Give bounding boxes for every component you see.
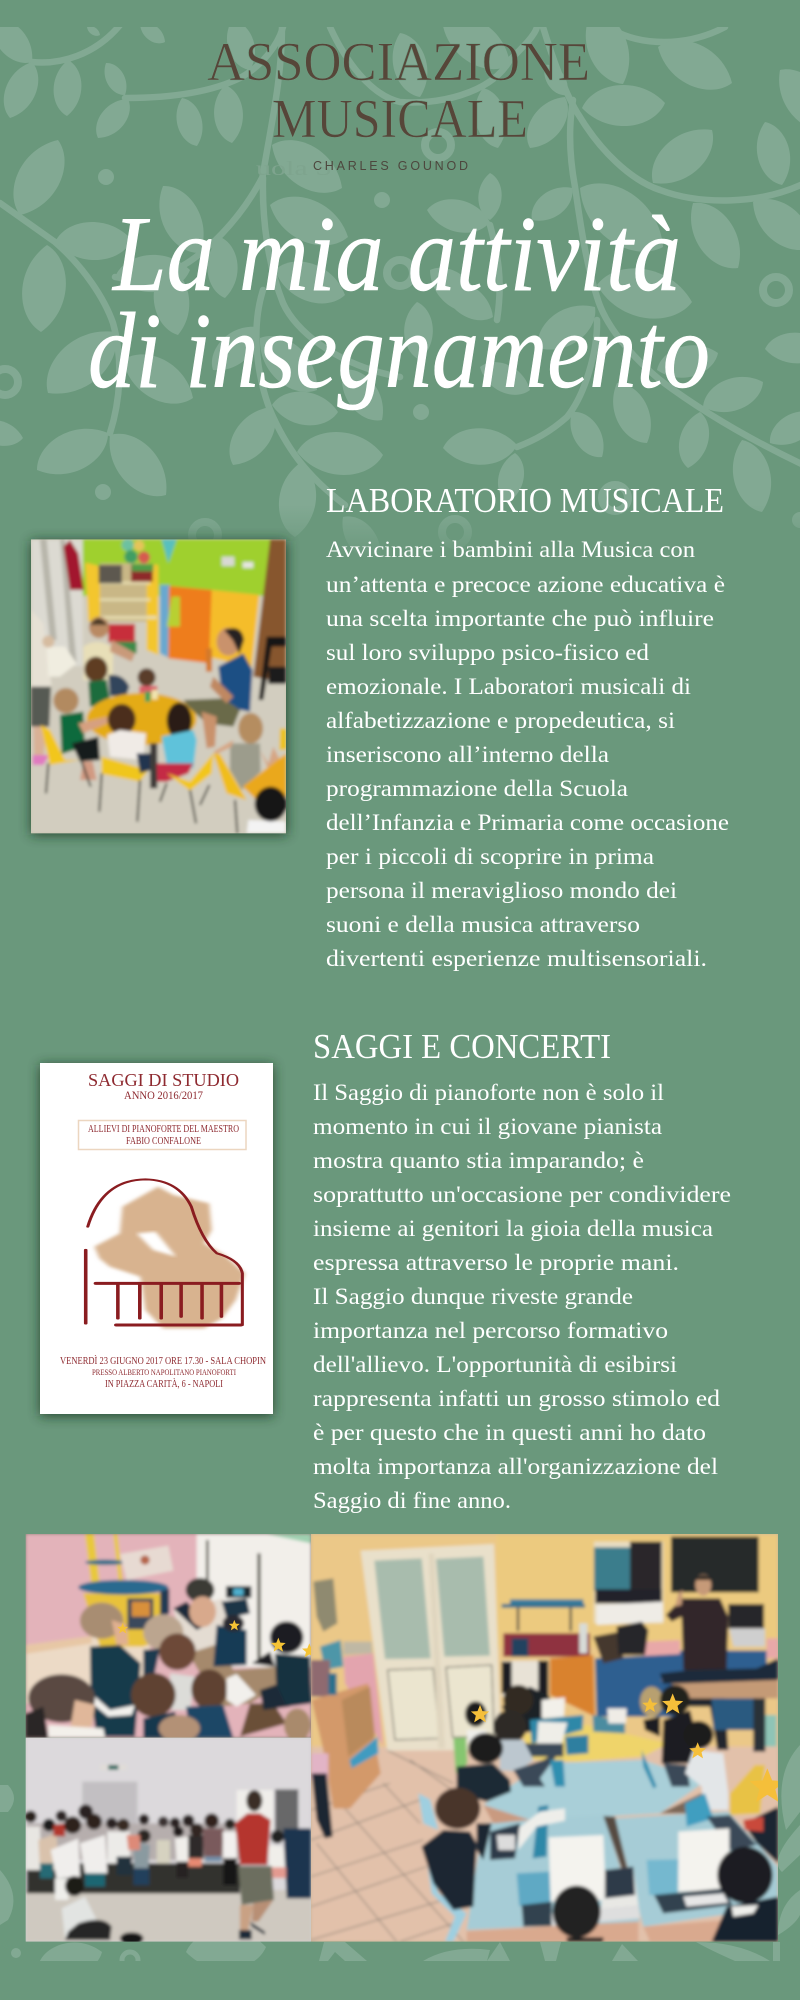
poster: saggi di studio: ANNO 2016/2017 xyxy=(124,1090,203,1102)
main heading xyxy=(88,195,710,411)
photo shadow: laboratorio xyxy=(31,541,287,835)
title: Associazione Musicale xyxy=(207,31,590,149)
subtitle: Charles Gounod: CHARLES GOUNOD xyxy=(313,159,468,173)
text block: Laboratorio musicale: alfabetizzazione e propedeutica, si xyxy=(326,708,675,733)
text block: Saggi e concerti: espressa attraverso le proprie mani. xyxy=(313,1250,679,1275)
text block: Laboratorio musicale: Avvicinare i bambini alla Musica con xyxy=(326,537,696,562)
text block: Laboratorio musicale: un’attenta e precoce azione educativa è xyxy=(326,572,725,597)
photo: teacher with children xyxy=(26,1534,317,1742)
text block: Laboratorio musicale: dell’Infanzia e Primaria come occasione xyxy=(326,810,729,835)
text block: Laboratorio musicale: inseriscono all’interno della xyxy=(326,742,609,767)
photo: laboratorio musicale xyxy=(31,539,287,833)
text block: Saggi e concerti: Il Saggio di pianoforte non è solo il xyxy=(313,1080,664,1105)
text block: Saggi e concerti: rappresenta infatti un grosso stimolo ed xyxy=(313,1386,721,1411)
text block: Laboratorio musicale: per i piccoli di scoprire in prima xyxy=(326,844,654,869)
text block: Saggi e concerti: molta importanza all'organizzazione del xyxy=(313,1454,718,1479)
section heading: Laboratorio musicale: LABORATORIO MUSICALE xyxy=(326,481,724,520)
text block: Saggi e concerti: è per questo che in questi anni ho dato xyxy=(313,1420,706,1445)
text block: Saggi e concerti: importanza nel percorso formativo xyxy=(313,1318,668,1343)
pattern fade into plain panel xyxy=(0,505,800,560)
text block: Laboratorio musicale: sul loro sviluppo psico-fisico ed xyxy=(326,640,650,665)
poster: saggi di studio: VENERDÌ 23 GIUGNO 2017 ORE 17.30 - SALA CHOPIN xyxy=(60,1355,266,1367)
text block: Saggi e concerti: Saggio di fine anno. xyxy=(313,1488,511,1513)
text block: Laboratorio musicale xyxy=(326,537,729,971)
title: Associazione Musicale: MUSICALE xyxy=(272,88,528,149)
lower band of the pattern xyxy=(11,1948,21,1958)
poster: saggi di studio: SAGGI DI STUDIO xyxy=(88,1070,239,1090)
text block: Saggi e concerti: soprattutto un'occasione per condividere xyxy=(313,1182,731,1207)
poster: saggi di studio xyxy=(40,1063,273,1414)
text block: Saggi e concerti: Il Saggio dunque riveste grande xyxy=(313,1284,633,1309)
section heading: Saggi e concerti: SAGGI E CONCERTI xyxy=(313,1027,611,1066)
poster: saggi di studio: ALLIEVI DI PIANOFORTE DEL MAESTRO xyxy=(88,1124,239,1135)
text block: Saggi e concerti xyxy=(313,1080,731,1513)
poster: saggi di studio: FABIO CONFALONE xyxy=(126,1136,201,1147)
text block: Laboratorio musicale: una scelta importante che può influire xyxy=(326,606,714,631)
main heading: di insegnamento xyxy=(88,292,710,411)
icons: star stickers xyxy=(471,1693,785,1802)
title: Associazione Musicale: ASSOCIAZIONE xyxy=(207,31,590,92)
text block: Laboratorio musicale: suoni e della musica attraverso xyxy=(326,912,640,937)
text block: Laboratorio musicale: emozionale. I Laboratori musicali di xyxy=(326,674,691,699)
main heading: La mia attività xyxy=(111,195,681,314)
faint ghost text: uola S xyxy=(256,158,332,180)
poster: saggi di studio: IN PIAZZA CARITÀ, 6 - NAPOLI xyxy=(105,1378,223,1390)
text block: Saggi e concerti: momento in cui il giovane pianista xyxy=(313,1114,662,1139)
icon: piano xyxy=(86,1179,245,1328)
text block: Saggi e concerti: insieme ai genitori la gioia della musica xyxy=(313,1216,713,1241)
text block: Laboratorio musicale: programmazione della Scuola xyxy=(326,776,628,801)
photo: keyboard classroom xyxy=(311,1534,785,1942)
icons: star stickers xyxy=(117,1620,317,1657)
text block: Laboratorio musicale: divertenti esperienze multisensoriali. xyxy=(326,946,707,971)
text block: Laboratorio musicale: persona il meraviglioso mondo dei xyxy=(326,878,677,903)
poster: saggi di studio: PRESSO ALBERTO NAPOLITANO PIANOFORTI xyxy=(92,1367,236,1377)
photo: children in hall xyxy=(25,1738,311,1944)
poster shadow xyxy=(40,1065,273,1416)
text block: Saggi e concerti: dell'allievo. L'opportunità di esibirsi xyxy=(313,1352,677,1377)
text block: Saggi e concerti: mostra quanto stia imparando; è xyxy=(313,1148,644,1173)
